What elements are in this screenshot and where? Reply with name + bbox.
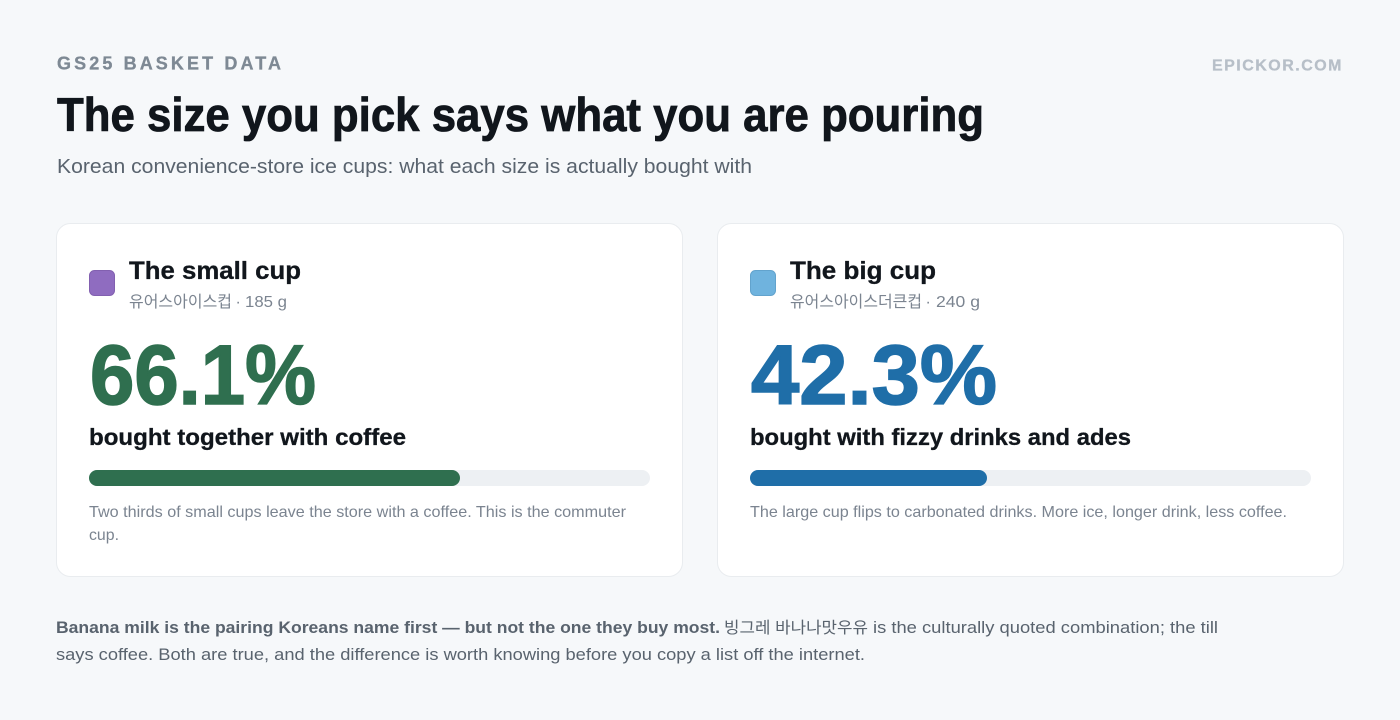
footnote: 빙그레 바나나맛우유 [724,619,868,637]
source label: EPICKOR.COM [1212,58,1342,74]
small cup product name: · [236,294,241,311]
footnote: says coffee. Both are true, and the difference is worth knowing before you copy a list off the internet. [56,645,865,664]
big cup heading: The big cup [790,257,936,285]
big cup description: The large cup flips to carbonated drinks. More ice, longer drink, less coffee. [750,504,1287,521]
small cup product name: 유어스아이스컵 [129,293,232,311]
eyebrow: GS25 BASKET DATA [57,54,281,74]
small cup label: bought together with coffee [89,424,406,450]
small cup product name [129,293,287,311]
panel: big cup [718,224,1344,576]
icon: purple swatch [90,270,114,296]
big cup percentage: 42.3% [751,328,997,422]
title: The size you pick says what you are pouring [57,88,984,141]
footnote [56,618,1218,664]
big cup product name [790,293,980,311]
big cup product name: 유어스아이스더큰컵 [790,293,922,311]
icon: blue swatch [750,270,776,296]
small cup description: cup. [89,527,119,544]
small cup description: Two thirds of small cups leave the store with a coffee. This is the commuter [89,504,627,521]
small cup percentage: 66.1% [90,328,316,422]
footnote: Banana milk is the pairing Koreans name first — but not the one they buy most. [56,618,720,637]
footnote: is the culturally quoted combination; the till [873,618,1218,637]
big cup label: bought with fizzy drinks and ades [750,424,1131,450]
subtitle: Korean convenience-store ice cups: what each size is actually bought with [57,155,752,178]
big cup product name: 240 g [936,294,980,311]
big cup product name: · [926,294,931,311]
small cup product name: 185 g [245,294,287,311]
small cup heading: The small cup [129,257,301,285]
panel: small cup [56,224,682,576]
small cup description [89,504,627,544]
big cup bar [750,470,1311,486]
small cup bar [89,470,650,486]
